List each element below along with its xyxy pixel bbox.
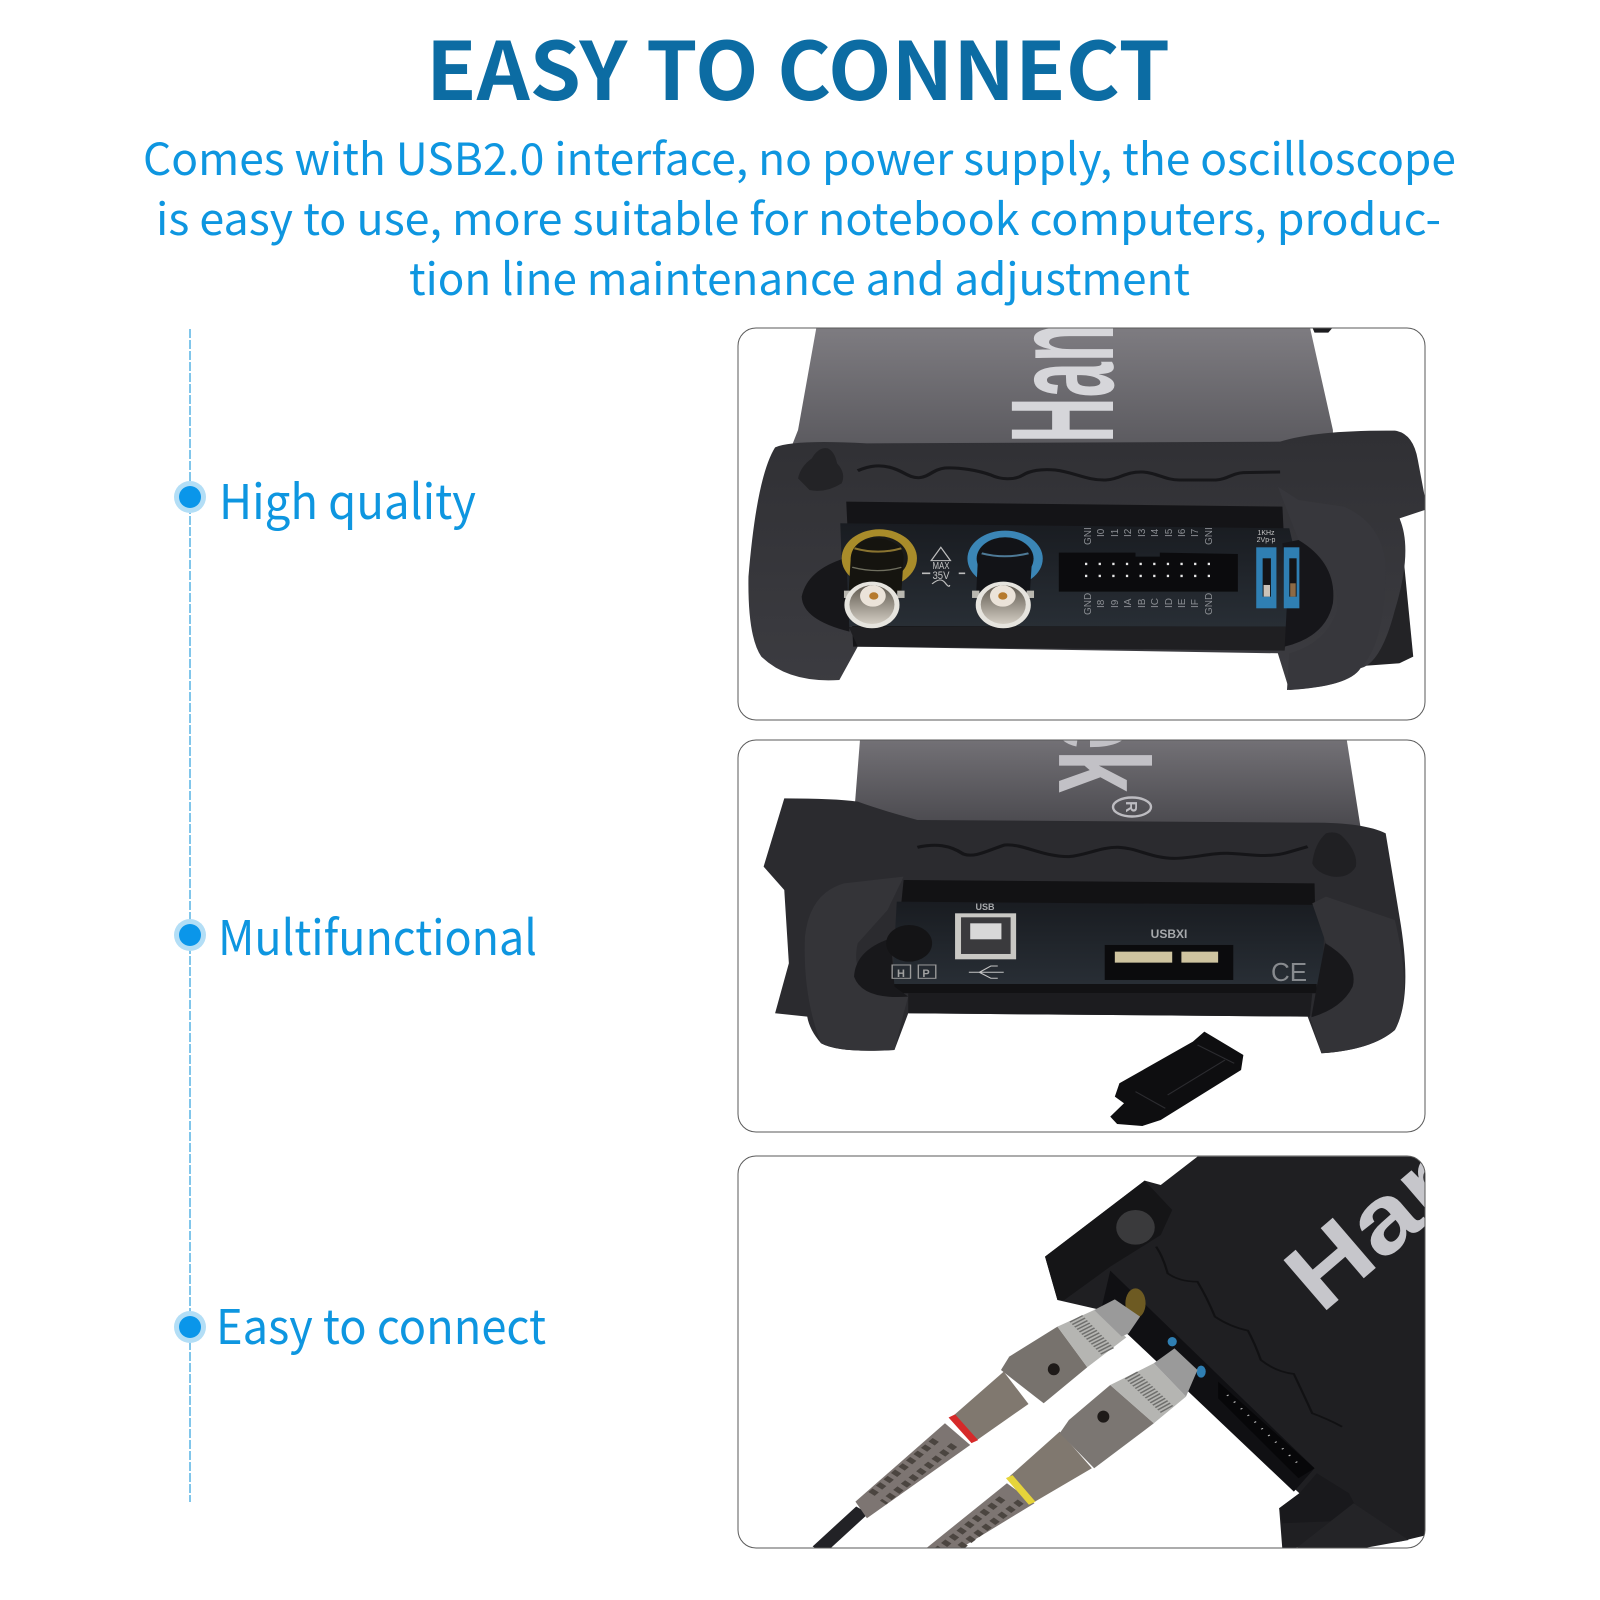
registered mark — [1113, 798, 1151, 816]
registered mark: R — [1122, 801, 1139, 813]
face plate — [846, 502, 1289, 647]
blue calibration terminals — [1256, 547, 1299, 608]
bullet dot — [174, 481, 206, 513]
bullet dot — [174, 1311, 206, 1343]
header pin labels: GNI — [1083, 527, 1094, 545]
lower bumper — [1279, 1493, 1300, 1510]
connector rings — [1125, 1288, 1206, 1378]
H and P boxes — [892, 965, 936, 978]
side grips — [805, 877, 908, 1051]
subtitle paragraph: Comes with USB2.0 interface, no power supply, the oscilloscope — [143, 124, 1456, 188]
USBXI port — [1105, 945, 1233, 980]
header pin labels: IC — [1150, 598, 1161, 608]
header pin labels: I3 — [1137, 528, 1148, 537]
port labels: USB — [975, 902, 995, 912]
USB-B port — [955, 913, 1016, 959]
logic header socket — [1059, 553, 1238, 592]
USB symbol — [969, 966, 1004, 978]
panel: oscilloscope rear with USB ports — [738, 707, 1425, 1132]
header pin labels: IF — [1190, 599, 1201, 608]
header pin labels: IA — [1123, 598, 1134, 608]
port cover — [1110, 1032, 1243, 1126]
Hantek logo: ek — [1031, 707, 1174, 793]
yellow BNC connector — [842, 529, 917, 628]
face plate — [892, 880, 1317, 993]
header pin labels: GND — [1204, 593, 1215, 615]
subtitle paragraph: tion line maintenance and adjustment — [409, 244, 1190, 308]
port labels — [897, 902, 1307, 987]
header pin labels: ID — [1164, 598, 1175, 608]
header pin labels — [1083, 527, 1215, 615]
rubber bumper — [764, 798, 1405, 1053]
header pin labels: I9 — [1110, 599, 1121, 608]
port labels: H — [897, 968, 905, 980]
header pin labels: I6 — [1177, 528, 1188, 537]
power knob — [886, 925, 932, 962]
label: Multifunctional — [218, 899, 537, 969]
port labels: USBXI — [1151, 927, 1187, 941]
title: EASY TO CONNECT — [426, 8, 1170, 124]
wave line — [1156, 1247, 1342, 1427]
header pin labels: I2 — [1123, 528, 1134, 537]
voltage text: 35V — [932, 570, 950, 582]
port labels: P — [922, 968, 930, 980]
device top housing — [789, 327, 1333, 453]
port labels: CE — [1271, 957, 1307, 987]
timeline dashed line — [189, 329, 191, 1502]
subtitle paragraph — [143, 124, 1456, 308]
header pin labels: I0 — [1096, 528, 1107, 537]
logic socket — [1218, 1382, 1315, 1478]
device top housing — [853, 739, 1360, 827]
voltage text — [932, 530, 1275, 582]
blue BNC connector — [967, 531, 1043, 628]
header pin labels: I5 — [1164, 528, 1175, 537]
device housing — [1045, 1157, 1427, 1550]
probe two — [922, 1348, 1197, 1555]
voltage text: 1KHz — [1257, 530, 1275, 537]
panel: probes connected to oscilloscope — [738, 1156, 1426, 1548]
panel: oscilloscope front with BNC connectors — [738, 328, 1426, 720]
arches — [802, 558, 849, 632]
Hantek logo: Hantek — [980, 232, 1144, 443]
feature: high quality — [174, 463, 476, 533]
header pin labels: I4 — [1150, 528, 1161, 537]
header pin labels: I7 — [1190, 528, 1201, 537]
header pin labels: GND — [1083, 593, 1094, 615]
header pin labels: I8 — [1096, 599, 1107, 608]
probe one — [819, 1299, 1140, 1550]
warning max voltage mark — [922, 547, 965, 586]
voltage text: 2Vp-p — [1257, 537, 1275, 544]
header pin labels: GNI — [1204, 527, 1215, 545]
header pin labels: IB — [1137, 598, 1148, 608]
feature: easy to connect — [174, 1288, 546, 1358]
label: High quality — [219, 463, 476, 533]
subtitle paragraph: is easy to use, more suitable for notebook computers, produc- — [156, 184, 1441, 248]
bullet dot — [174, 919, 206, 951]
feature: multifunctional — [174, 899, 537, 969]
Hantek logo: Han — [1264, 1113, 1492, 1330]
label: Easy to connect — [216, 1288, 546, 1358]
rubber bumper — [748, 431, 1425, 690]
header pin labels: IE — [1177, 598, 1188, 608]
header pin labels: I1 — [1110, 528, 1121, 537]
front face strip — [1101, 1271, 1315, 1492]
voltage text: MAX — [932, 561, 950, 572]
